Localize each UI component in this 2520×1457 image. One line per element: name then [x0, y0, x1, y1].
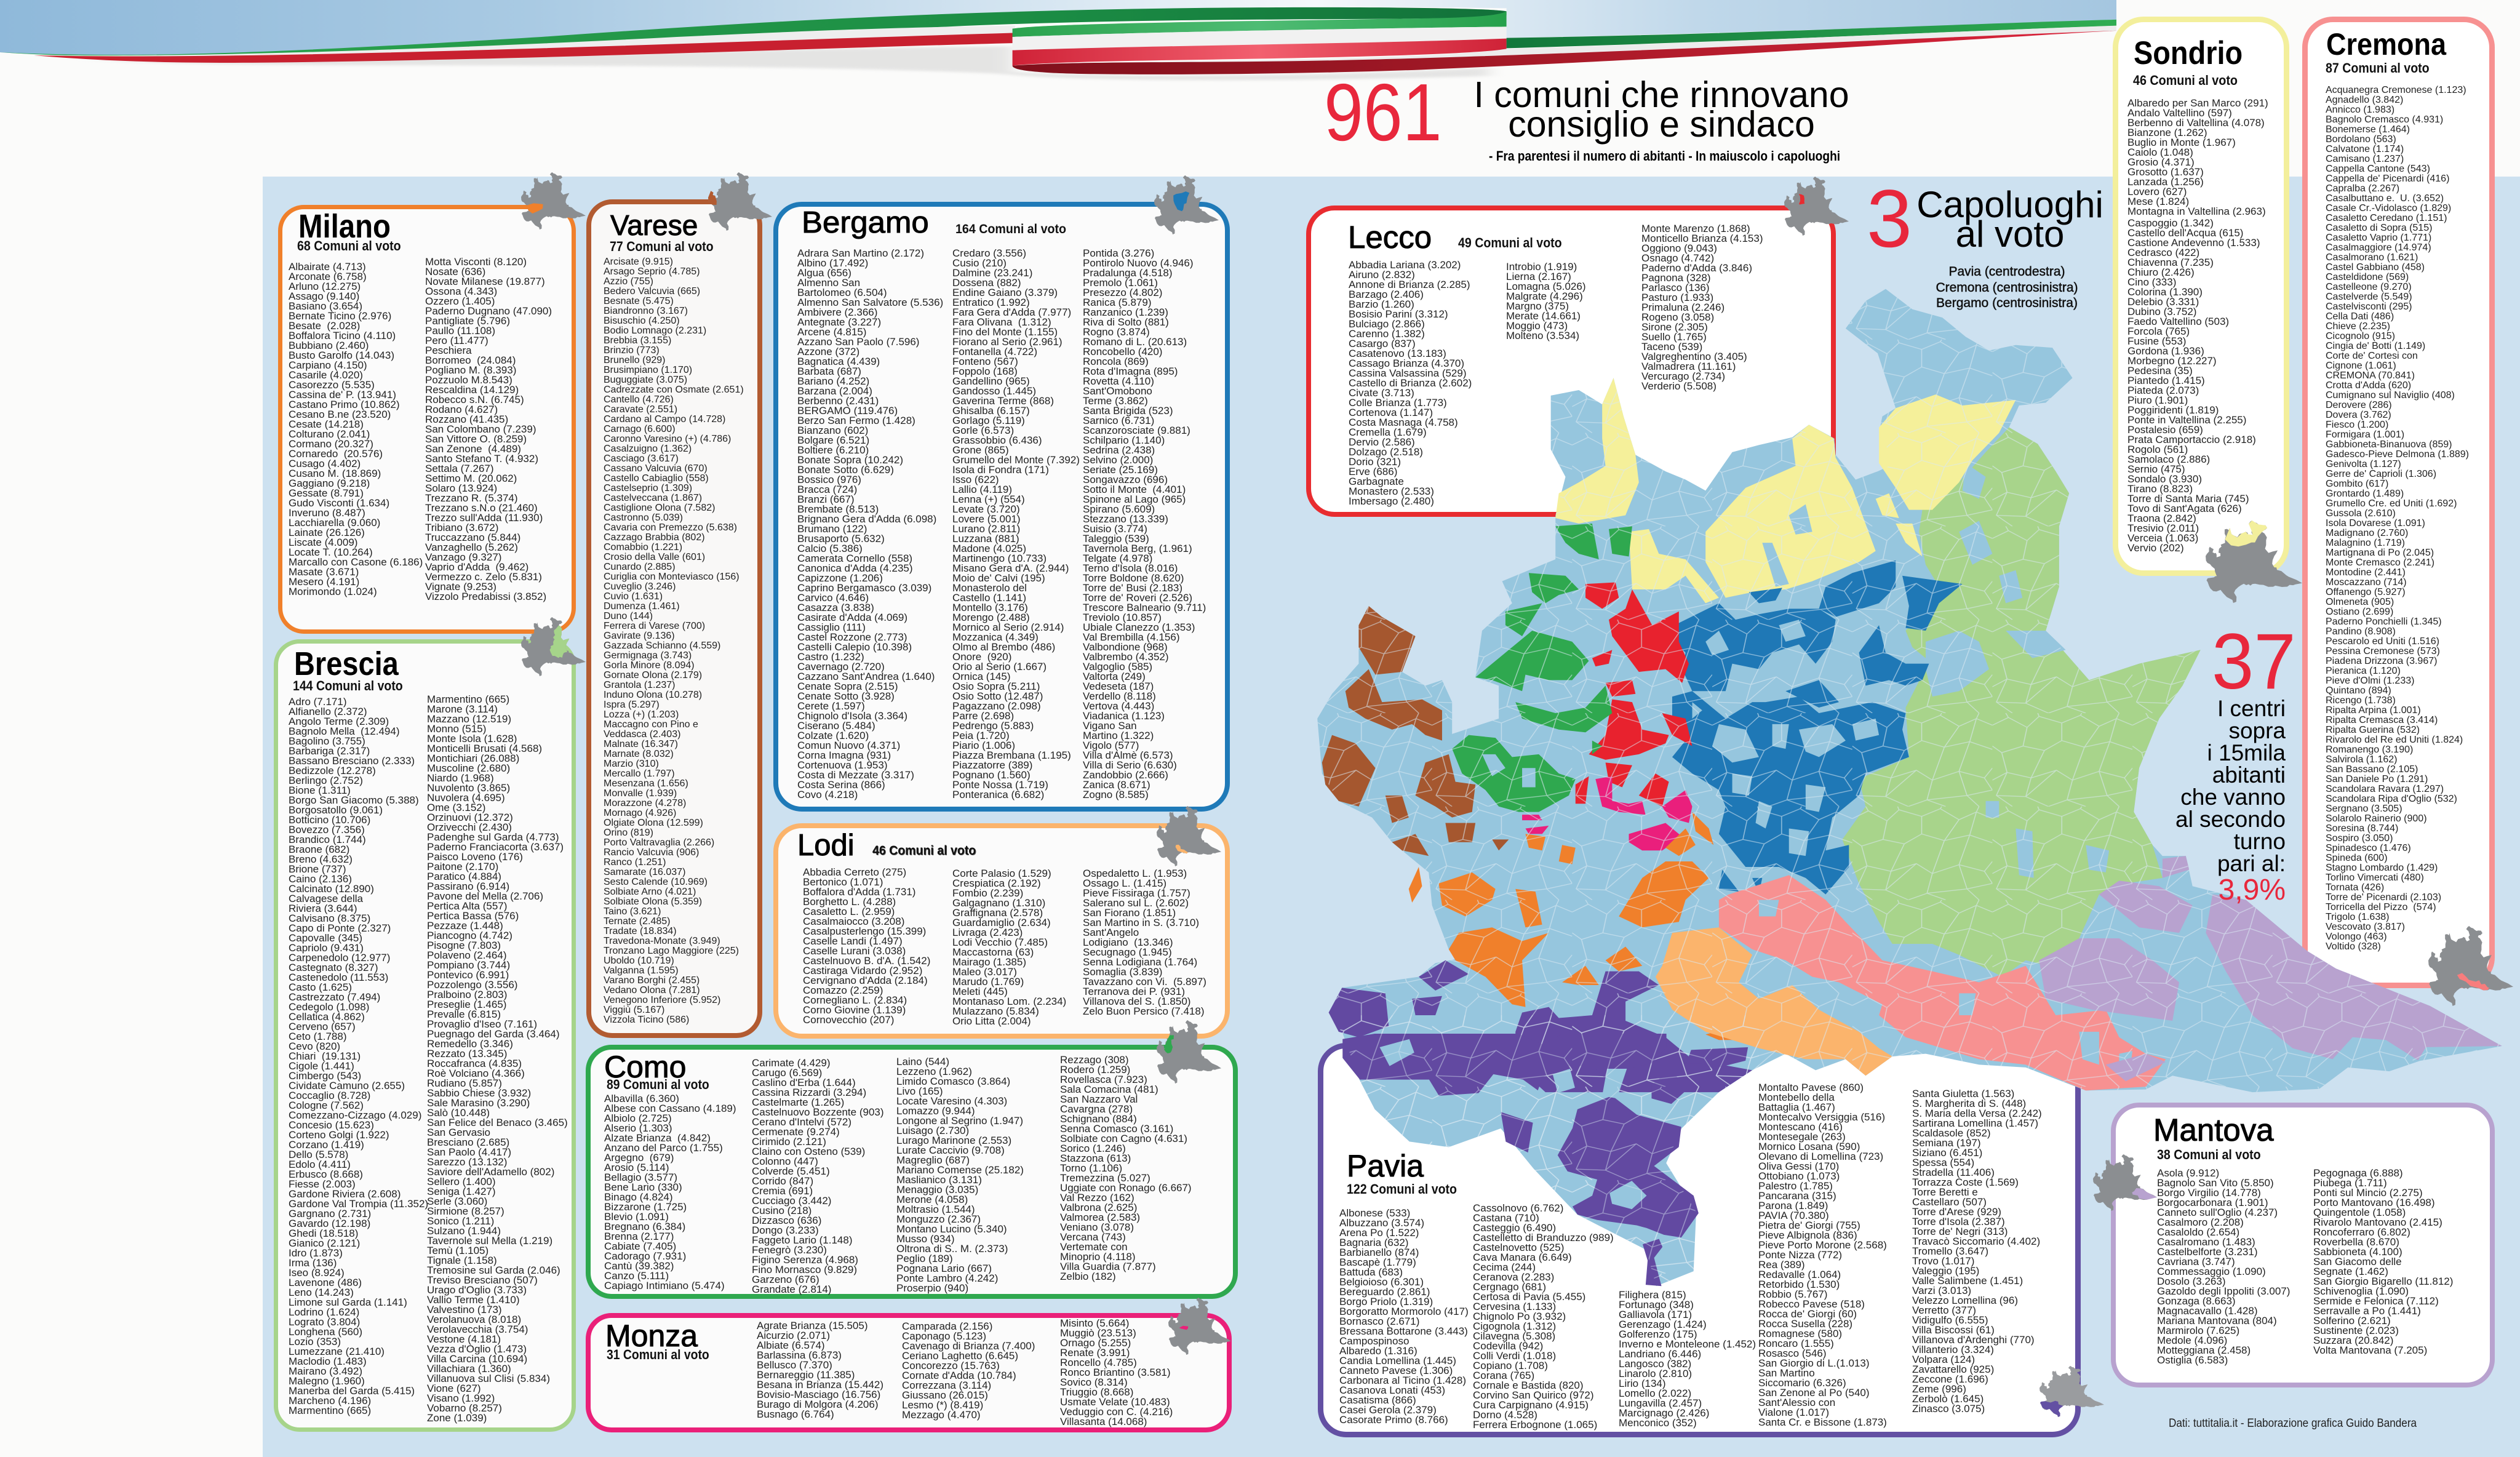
mini map: Mantova: [2093, 1154, 2157, 1211]
Pavia list column 5: Santa Giuletta (1.563) S. Margherita di S. (448) S. Maria della Versa (2.242) Sartirana Lomellina (1.457) Scaldasole (852) Semiana (197) Siziano (6.451) Spessa (554) Stradella (11.406) Torrazza Coste (1.569) Torre Beretti e Castellaro (507) Torre d'Arese (929) Torre d'Isola (2.387) Torre de' Negri (313) Travacò Siccomario (4.402) Tromello (3.647) Trovo (1.017) Valeggio (195) Valle Salimbene (1.451) Varzi (3.013) Velezzo Lomellina (96) Verretto (377) Vidigulfo (6.555) Villa Biscossi (61) Villanova d'Ardenghi (770) Villanterio (3.324) Volpara (124) Zavattarello (925) Zeccone (1.696) Zeme (996) Zerbolò (1.645) Zinasco (3.075): [1912, 1088, 2042, 1415]
Lodi title: Lodi: [797, 829, 855, 862]
number 3: 3: [1867, 174, 1912, 265]
Bergamo list column 3: Pontida (3.276) Pontirolo Nuovo (4.946) Pradalunga (4.518) Premolo (1.061) Presezzo (4.802) Ranica (5.879) Ranzanico (1.239) Riva di Solto (881) Rogno (3.874) Romano di L. (20.613) Roncobello (420) Roncola (869) Rota d'Imagna (895) Rovetta (4.110) Sant'Omobono Terme (3.862) Santa Brigida (523) Sarnico (6.731) Scanzorosciate (9.881) Schilpario (1.140) Sedrina (2.438) Selvino (2.000) Seriate (25.169) Songavazzo (696) Sotto il Monte (4.401) Spinone al Lago (965) Spirano (5.609) Stezzano (13.339) Suisio (3.774) Taleggio (539) Tavernola Berg, (1.961) Telgate (4.978) Terno d'Isola (8.016) Torre Boldone (8.620) Torre de' Busi (2.183) Torre de' Roveri (2.526) Trescore Balneario (9.711) Treviolo (10.857) Ubiale Clanezzo (1.353) Val Brembilla (4.156) Valbondione (968) Valbrembo (4.352) Valgoglio (585) Valtorta (249) Vedeseta (187) Verdello (8.118) Vertova (4.443) Viadanica (1.123) Vigano San Martino (1.322) Vigolo (577) Villa d'Almè (6.573) Villa di Serio (6.630) Zandobbio (2.666) Zanica (8.671) Zogno (8.585): [1083, 247, 1206, 800]
callout text: I centri sopra i 15mila abitanti che vanno al secondo turno pari al:: [2175, 696, 2286, 876]
Milano list column 2: Motta Visconti (8.120) Nosate (636) Novate Milanese (19.877) Ossona (4.343) Ozzero (1.405) Paderno Dugnano (47.090) Pantigliate (5.796) Paullo (11.108) Pero (11.477) Peschiera Borromeo (24.084) Pogliano M. (8.393) Pozzuolo M.8.543) Rescaldina (14.129) Robecco s.N. (6.745) Rodano (4.627) Rozzano (41.435) San Colombano (7.239) San Vittore O. (8.259) San Zenone (4.489) Santo Stefano T. (4.932) Settala (7.267) Settimo M. (20.062) Solaro (13.924) Trezzano R. (5.374) Trezzano s.N.o (21.460) Trezzo sull'Adda (11.930) Tribiano (3.672) Truccazzano (5.844) Vanzaghello (5.262) Vanzago (9.327) Vaprio d'Adda (9.462) Vermezzo c. Zelo (5.831) Vignate (9.253) Vizzolo Predabissi (3.852): [425, 256, 552, 602]
Bergamo list column 2: Credaro (3.556) Cusio (210) Dalmine (23.241) Dossena (882) Endine Gaiano (3.379) Entratico (1.992) Fara Gera d'Adda (7.977) Fara Olivana (1.312) Fino del Monte (1.155) Fiorano al Serio (2.961) Fontanella (4.722) Fonteno (567) Foppolo (168) Gandellino (965) Gandosso (1.445) Gaverina Terme (868) Ghisalba (6.157) Gorlago (5.119) Gorle (6.573) Grassobbio (6.436) Grone (865) Grumello del Monte (7.392) Isola di Fondra (171) Isso (622) Lallio (4.119) Lenna (+) (554) Levate (3.720) Lovere (5.001) Lurano (2.811) Luzzana (881) Madone (4.025) Martinengo (10.733) Misano Gera d'A. (2.944) Moio de' Calvi (195) Monasterolo del Castello (1.141) Montello (3.176) Morengo (2.488) Mornico al Serio (2.914) Mozzanica (4.349) Olmo al Brembo (486) Onore (920) Orio al Serio (1.667) Ornica (145) Osio Sopra (5.211) Osio Sotto (12.487) Pagazzano (2.098) Parre (2.698) Pedrengo (5.883) Peia (1.720) Piario (1.006) Piazza Brembana (1.195) Piazzatorre (389) Pognano (1.560) Ponte Nossa (1.719) Ponteranica (6.682): [952, 247, 1080, 800]
province: Como: [1452, 524, 1632, 812]
blue background panel: [263, 177, 2520, 1457]
Como list column 4: Rezzago (308) Rodero (1.259) Rovellasca (7.923) Sala Comacina (481) San Nazzaro Val Cavargna (278) Schignano (884) Senna Comasco (3.161) Solbiate con Cagno (4.631) Sorico (1.246) Stazzona (613) Torno (1.106) Tremezzina (5.027) Uggiate con Ronago (6.667) Val Rezzo (162) Valbrona (2.625) Valmorea (2.583) Veniano (3.078) Vercana (743) Vertemate con Minoprio (4.118) Villa Guardia (7.877) Zelbio (182): [1060, 1054, 1192, 1282]
Monza list column 2: Camparada (2.156) Caponago (5.123) Cavenago di Brianza (7.400) Ceriano Laghetto (6.645) Concorezzo (15.763) Cornate d'Adda (10.784) Correzzana (3.114) Giussano (26.015) Lesmo (*) (8.419) Mezzago (4.470): [902, 1320, 1035, 1421]
Como count: 89 Comuni al voto: [607, 1077, 709, 1092]
panel text: Cremona: [2326, 27, 2469, 952]
Lodi list column 1: Abbadia Cerreto (275) Bertonico (1.071) Boffalora d'Adda (1.731) Borghetto L. (4.288) Casaletto L. (2.959) Casalmaiocco (3.208) Casalpusterlengo (15.399) Caselle Landi (1.497) Caselle Lurani (3.038) Castelnuovo B. d'A. (1.542) Castiraga Vidardo (2.952) Cervignano d'Adda (2.184) Comazzo (2.259) Cornegliano L. (2.834) Corno Giovine (1.139) Cornovecchio (207): [803, 866, 930, 1026]
panel: Milano: [278, 205, 576, 634]
Mantova title: Mantova: [2153, 1112, 2274, 1148]
tricolour ribbon banner: [0, 0, 2116, 81]
municipal borders: [1292, 279, 2513, 1295]
province: Monza: [1522, 776, 1693, 850]
mini map: Bergamo: [1154, 175, 1219, 234]
Lodi count: 46 Comuni al voto: [872, 844, 976, 858]
Milano title: Milano: [298, 208, 391, 245]
Pavia title: Pavia: [1347, 1149, 1424, 1183]
panel: Lodi: [773, 823, 1230, 1039]
Lecco list column 1: Abbadia Lariana (3.202) Airuno (2.832) Annone di Brianza (2.285) Barzago (2.406) Barzio (1.260) Bosisio Parini (3.312) Bulciago (2.866) Carenno (1.382) Casargo (837) Casatenovo (13.183) Cassago Brianza (4.370) Cassina Valsassina (529) Castello di Brianza (2.602) Civate (3.713) Colle Brianza (1.773) Cortenova (1.147) Costa Masnaga (4.758) Cremella (1.679) Dervio (2.586) Dolzago (2.518) Dorio (321) Erve (686) Garbagnate Monastero (2.533) Imbersago (2.480): [1349, 259, 1472, 507]
Lecco list column 3: Monte Marenzo (1.868) Monticello Brianza (4.153) Oggiono (9.043) Osnago (4.742) Paderno d'Adda (3.846) Pagnona (328) Parlasco (136) Pasturo (1.933) Primaluna (2.246) Rogeno (3.058) Sirone (2.305) Suello (1.765) Taceno (539) Valgreghentino (3.405) Valmadrera (11.161) Vercurago (2.734) Verderio (5.508): [1641, 223, 1763, 392]
map: Lombardy municipalities voting by province: [1317, 289, 2502, 1286]
Brescia title: Brescia: [294, 645, 399, 682]
panel text: Mantova: [2153, 1112, 2453, 1366]
province: Lecco: [1576, 582, 1693, 807]
Pavia list column 3: Filighera (815) Fortunago (348) Galliavola (171) Gerenzago (1.424) Golferenzo (175) Inverno e Monteleone (1.452) Landriano (6.446) Langosco (382) Linarolo (2.810) Lirio (134) Lomello (2.022) Lungavilla (2.457) Marcignago (2.426) Menconico (352): [1619, 1289, 1756, 1429]
province: Lodi: [1656, 927, 1892, 1076]
mini map: Brescia: [521, 617, 586, 676]
mini map: Lecco: [1784, 177, 1849, 236]
panel: Varese: [586, 199, 762, 1038]
Sondrio list part 1: Albaredo per San Marco (291) Andalo Valtellino (597) Berbenno di Valtellina (4.078) Bianzone (1.262) Buglio in Monte (1.967) Caiolo (1.048) Grosio (4.371) Grosotto (1.637) Lanzada (1.256) Lovero (627) Mese (1.824) Montagna in Valtellina (2.963): [2127, 97, 2268, 217]
panel frame: Mantova: [2111, 1103, 2495, 1387]
Lecco title: Lecco: [1348, 220, 1432, 255]
mini map: Como: [1157, 1020, 1221, 1084]
panel frame: Cremona: [2302, 17, 2495, 988]
heading: number of comuni: 961: [1324, 67, 1442, 158]
mini map: Monza: [1168, 1298, 1231, 1355]
Mantova list column 1: Asola (9.912) Bagnolo San Vito (5.850) Borgo Virgilio (14.778) Borgocarbonara (1.901) Canneto sull'Oglio (4.237) Casalmoro (2.208) Casaloldo (2.654) Casalromano (1.483) Castelbelforte (3.231) Cavriana (3.747) Commessaggio (1.090) Dosolo (3.263) Gazoldo degli Ippoliti (3.007) Gonzaga (8.663) Magnacavallo (1.428) Mariana Mantovana (804) Marmirolo (7.625) Medole (4.096) Motteggiana (2.458) Ostiglia (6.583): [2157, 1167, 2290, 1366]
Bergamo title: Bergamo: [802, 206, 929, 239]
province: Mantova: [2039, 856, 2502, 1081]
Varese title: Varese: [610, 209, 698, 241]
province: Cremona: [1719, 875, 2166, 1090]
province: Pavia south: [1342, 1034, 1748, 1286]
callout: 3 capoluoghi: [1867, 174, 2103, 310]
Sondrio count: 46 Comuni al voto: [2133, 73, 2238, 88]
Mantova list column 2: Pegognaga (6.888) Piubega (1.711) Ponti sul Mincio (2.275) Porto Mantovano (16.498) Quingentole (1.058) Rivarolo Mantovano (2.415) Roncoferraro (6.802) Roverbella (8.670) Sabbioneta (4.100) San Giacomo delle Segnate (1.462) San Giorgio Bigarello (11.812) Schivenoglia (1.090) Sermide e Felonica (7.112) Serravalle a Po (1.441) Solferino (2.621) Sustinente (2.023) Suzzara (20.842) Volta Mantovana (7.205): [2313, 1167, 2453, 1356]
Mantova count: 38 Comuni al voto: [2157, 1147, 2261, 1162]
mini map: Pavia: [2040, 1366, 2104, 1417]
capoluoghi heading: Capoluoghi al voto: [1916, 184, 2103, 255]
Monza list column 3: Misinto (5.664) Muggiò (23.513) Ornago (5.255) Renate (3.991) Roncello (4.785) Ronco Briantino (3.581) Sovico (8.314) Triuggio (8.668) Usmate Velate (10.483) Veduggio con C. (4.216) Villasanta (14.068): [1060, 1317, 1173, 1427]
Brescia count: 144 Comuni al voto: [293, 678, 403, 693]
Lecco list column 2: Introbio (1.919) Lierna (2.167) Lomagna (5.026) Malgrate (4.296) Margno (375) Merate (14.661) Moggio (473) Molteno (3.534): [1506, 261, 1585, 341]
Cremona list: Acquanegra Cremonese (1.123) Agnadello (3.842) Annicco (1.983) Bagnolo Cremasco (4.931) Bonemerse (1.464) Bordolano (563) Calvatone (1.174) Camisano (1.237) Cappella Cantone (543) Cappella de' Picenardi (416) Capralba (2.267) Casalbuttano e. U. (3.652) Casale Cr.-Vidolasco (1.829) Casaletto Ceredano (1.151) Casaletto di Sopra (515) Casaletto Vaprio (1.771) Casalmaggiore (14.974) Casalmorano (1.621) Castel Gabbiano (458) Casteldidone (569) Castelleone (9.270) Castelverde (5.549) Castelvisconti (295) Cella Dati (486) Chieve (2.235) Cicognolo (915) Cingia de' Botti (1.149) Corte de' Cortesi con Cignone (1.061) CREMONA (70.841) Crotta d'Adda (620) Cumignano sul Naviglio (408) Derovere (286) Dovera (3.762) Fiesco (1.200) Formigara (1.001) Gabbioneta-Binanuova (859) Gadesco-Pieve Delmona (1.889) Genivolta (1.127) Gerre de' Caprioli (1.306) Gombito (617) Grontardo (1.489) Grumello Cre. ed Uniti (1.692) Gussola (2.610) Isola Dovarese (1.091) Madignano (2.760) Malagnino (1.719) Martignana di Po (2.045) Monte Cremasco (2.241) Montodine (2.441) Moscazzano (714) Offanengo (5.927) Olmeneta (905) Ostiano (2.699) Paderno Ponchielli (1.345) Pandino (8.908) Pescarolo ed Uniti (1.516) Pessina Cremonese (573) Piadena Drizzona (3.967) Pieranica (1.120) Pieve d'Olmi (1.233) Quintano (894) Ricengo (1.738) Ripalta Arpina (1.001) Ripalta Cremasca (3.414) Ripalta Guerina (532) Rivarolo del Re ed Uniti (1.824) Romanengo (3.190) Salvirola (1.162) San Bassano (2.105) San Daniele Po (1.291) Scandolara Ravara (1.297) Scandolara Ripa d'Oglio (532) Sergnano (3.505) Solarolo Rainerio (900) Soresina (8.744) Sospiro (3.050) Spinadesco (1.476) Spineda (600) Stagno Lombardo (1.429) Torlino Vimercati (480) Tornata (426) Torre de' Picenardi (2.103) Torricella del Pizzo (574) Trigolo (1.638) Vescovato (3.817) Volongo (463) Voltido (328): [2326, 85, 2469, 952]
panel frame: Pavia: [1318, 1043, 2081, 1437]
capoluoghi list: Pavia (centrodestra) Cremona (centrosinistra) Bergamo (centrosinistra): [1936, 265, 2078, 310]
panel: Bergamo: [773, 202, 1230, 812]
mini map: Milano: [521, 172, 586, 230]
Pavia list column 2: Cassolnovo (6.762) Castana (710) Casteggio (6.490) Castelletto di Branduzzo (989) Castelnovetto (525) Cava Manara (6.649) Cecima (244) Ceranova (2.283) Cergnago (681) Certosa di Pavia (5.455) Cervesina (1.133) Chignolo Po (3.932) Cigognola (1.312) Cilavegna (5.308) Codevilla (942) Colli Verdi (1.018) Copiano (1.708) Corana (765) Cornale e Bastida (820) Corvino San Quirico (972) Cura Carpignano (4.915) Dorno (4.528) Ferrera Erbognone (1.065): [1473, 1202, 1614, 1431]
panel text: Pavia: [1339, 1082, 2042, 1431]
Pavia list column 4: Montalto Pavese (860) Montebello della Battaglia (1.467) Montecalvo Versiggia (516) Montescano (416) Montesegale (263) Mornico Losana (590) Olevano di Lomellina (723) Oliva Gessi (170) Ottobiano (1.073) Palestro (1.785) Pancarana (315) Parona (1.849) PAVIA (70.380) Pietra de' Giorgi (755) Pieve Albignola (836) Pieve Porto Morone (2.568) Ponte Nizza (772) Rea (389) Redavalle (1.064) Retorbido (1.530) Robbio (5.767) Robecco Pavese (518) Rocca de' Giorgi (60) Rocca Susella (228) Romagnese (580) Roncaro (1.555) Rosasco (546) San Giorgio di L.(1.013) San Martino Siccomario (6.326) San Zenone al Po (540) Sant'Alessio con Vialone (1.017) Santa Cr. e Bissone (1.873): [1758, 1082, 1887, 1428]
Bergamo list column 1: Adrara San Martino (2.172) Albino (17.492) Algua (656) Almenno San Bartolomeo (6.504) Almenno San Salvatore (5.536) Ambivere (2.366) Antegnate (3.227) Arcene (4.815) Azzano San Paolo (7.596) Azzone (372) Bagnatica (4.439) Barbata (687) Bariano (4.252) Barzana (2.004) Berbenno (2.431) BERGAMO (119.476) Berzo San Fermo (1.428) Bianzano (602) Bolgare (6.521) Boltiere (6.210) Bonate Sopra (10.242) Bonate Sotto (6.629) Bossico (976) Bracca (724) Branzi (667) Brembate (8.513) Brignano Gera d'Adda (6.098) Brumano (122) Brusaporto (5.632) Calcio (5.386) Camerata Cornello (558) Canonica d'Adda (4.235) Capizzone (1.206) Caprino Bergamasco (3.039) Carvico (4.646) Casazza (3.838) Casirate d'Adda (4.069) Cassiglio (111) Castel Rozzone (2.773) Castelli Calepio (10.398) Castro (1.232) Cavernago (2.720) Cazzano Sant'Andrea (1.640) Cenate Sopra (2.515) Cenate Sotto (3.928) Cerete (1.597) Chignolo d'Isola (3.364) Ciserano (5.484) Colzate (1.620) Comun Nuovo (4.371) Corna Imagna (931) Cortenuova (1.953) Costa di Mezzate (3.317) Costa Serina (866) Covo (4.218): [797, 247, 943, 800]
Lecco count: 49 Comuni al voto: [1458, 235, 1562, 250]
base: municipalities not voting: [1317, 289, 2502, 1286]
panel: Como: [586, 1045, 1238, 1299]
percentage: 3,9%: [2219, 874, 2286, 906]
Varese list: Arcisate (9.915) Arsago Seprio (4.785) Azzio (755) Bedero Valcuvia (665) Besnate (5.475) Biandronno (3.167) Bisuschio (4.250) Bodio Lomnago (2.231) Brebbia (3.155) Brinzio (773) Brunello (929) Brusimpiano (1.170) Buguggiate (3.075) Cadrezzate con Osmate (2.651) Cantello (4.726) Caravate (2.551) Cardano al Campo (14.728) Carnago (6.600) Caronno Varesino (+) (4.786) Casalzuigno (1.362) Casciago (3.617) Cassano Valcuvia (670) Castello Cabiaglio (558) Castelseprio (1.309) Castelveccana (1.867) Castiglione Olona (7.582) Castronno (5.039) Cavaria con Premezzo (5.638) Cazzago Brabbia (802) Comabbio (1.221) Crosio della Valle (601) Cunardo (2.885) Curiglia con Monteviasco (156) Cuveglio (3.246) Cuvio (1.631) Dumenza (1.461) Duno (144) Ferrera di Varese (700) Gavirate (9.136) Gazzada Schianno (4.559) Germignaga (3.743) Gorla Minore (8.094) Gornate Olona (2.179) Grantola (1.237) Induno Olona (10.278) Ispra (5.297) Lozza (+) (1.203) Maccagno con Pino e Veddasca (2.403) Malnate (16.347) Marnate (8.032) Marzio (310) Mercallo (1.797) Mesenzana (1.656) Monvalle (1.939) Morazzone (4.278) Mornago (4.926) Olgiate Olona (12.599) Orino (819) Porto Valtravaglia (2.266) Rancio Valcuvia (906) Ranco (1.251) Samarate (16.037) Sesto Calende (10.969) Solbiate Arno (4.021) Solbiate Olona (5.359) Taino (3.621) Ternate (2.485) Tradate (18.834) Travedona-Monate (3.949) Tronzano Lago Maggiore (225) Uboldo (10.719) Valganna (1.595) Varano Borghi (2.455) Vedano Olona (7.281) Venegono Inferiore (5.952) Viggiù (5.167) Vizzola Ticino (586): [604, 257, 744, 1025]
panel: Monza: [586, 1313, 1232, 1432]
Monza list column 1: Agrate Brianza (15.505) Aicurzio (2.071) Albiate (6.574) Barlassina (6.873) Bellusco (7.370) Bernareggio (11.385) Besana in Brianza (15.442) Bovisio-Masciago (16.756) Burago di Molgora (4.206) Busnago (6.764): [757, 1320, 883, 1420]
Lodi list column 2: Corte Palasio (1.529) Crespiatica (2.192) Fombio (2.239) Galgagnano (1.310) Graffignana (2.578) Guardamiglio (2.634) Livraga (2.423) Lodi Vecchio (7.485) Maccastorna (63) Mairago (1.385) Maleo (3.017) Marudo (1.769) Meleti (445) Montanaso Lom. (2.234) Mulazzano (5.834) Orio Litta (2.004): [952, 868, 1066, 1027]
Varese count: 77 Comuni al voto: [610, 239, 714, 254]
province: Pavia north: [1329, 960, 1752, 1092]
Pavia count: 122 Comuni al voto: [1347, 1181, 1457, 1197]
Brescia list column 1: Adro (7.171) Alfianello (2.372) Angolo Terme (2.309) Bagnolo Mella (12.494) Bagolino (3.755) Barbariga (2.317) Bassano Bresciano (2.333) Bedizzole (12.278) Berlingo (2.752) Bione (1.311) Borgo San Giacomo (5.388) Borgosatollo (9.061) Botticino (10.706) Bovezzo (7.356) Brandico (1.744) Braone (682) Breno (4.632) Brione (737) Caino (2.136) Calcinato (12.890) Calvagese della Riviera (3.644) Calvisano (8.375) Capo di Ponte (2.327) Capovalle (345) Capriolo (9.431) Carpenedolo (12.977) Castegnato (8.327) Castenedolo (11.553) Casto (1.625) Castrezzato (7.494) Cedegolo (1.098) Cellatica (4.862) Cerveno (657) Ceto (1.788) Cevo (820) Chiari (19.131) Cigole (1.441) Cimbergo (543) Cividate Camuno (2.655) Coccaglio (8.728) Cologne (7.562) Comezzano-Cizzago (4.029) Concesio (15.623) Corteno Golgi (1.922) Corzano (1.419) Dello (5.578) Edolo (4.411) Erbusco (8.668) Fiesse (2.003) Gardone Riviera (2.608) Gardone Val Trompia (11.352) Gargnano (2.731) Gavardo (12.198) Ghedi (18.518) Gianico (2.121) Idro (1.873) Irma (136) Iseo (8.924) Lavenone (486) Leno (14.243) Limone sul Garda (1.141) Lodrino (1.624) Lograto (3.804) Longhena (560) Lozio (353) Lumezzane (21.410) Maclodio (1.483) Mairano (3.492) Malegno (1.960) Manerba del Garda (5.415) Marcheno (4.196) Marmentino (665): [289, 696, 428, 1416]
Sondrio title: Sondrio: [2134, 35, 2243, 71]
Monza title: Monza: [605, 1319, 698, 1353]
province: Milano: [1409, 812, 1739, 1040]
Cremona title: Cremona: [2326, 27, 2446, 62]
panel text: Lecco: [1348, 220, 1763, 507]
Lodi list column 3: Ospedaletto L. (1.953) Ossago L. (1.415) Pieve Fissiraga (1.757) Salerano sul L. (2.602) San Fiorano (1.851) San Martino in S. (3.710) Sant'Angelo Lodigiano (13.346) Secugnago (1.945) Senna Lodigiana (1.764) Somaglia (3.839) Tavazzano con Vi. (5.897) Terranova dei P. (931) Villanova del S. (1.850) Zelo Buon Persico (7.418): [1083, 868, 1206, 1017]
panel: Sondrio: [2113, 17, 2289, 576]
mini map: Lodi: [1157, 806, 1221, 866]
Bergamo count: 164 Comuni al voto: [955, 222, 1066, 236]
Milano list column 1: Albairate (4.713) Arconate (6.758) Arluno (12.275) Assago (9.140) Basiano (3.654) Bernate Ticino (2.976) Besate (2.028) Boffalora Ticino (4.110) Bubbiano (2.460) Busto Garolfo (14.043) Carpiano (4.150) Casarile (4.020) Casorezzo (5.535) Cassina de' P. (13.941) Castano Primo (10.862) Cesano B.ne (23.520) Cesate (14.218) Colturano (2.041) Cormano (20.327) Cornaredo (20.576) Cusago (4.402) Cusano M. (18.869) Gaggiano (9.218) Gessate (8.791) Gudo Visconti (1.634) Inveruno (8.487) Lacchiarella (9.060) Lainate (26.126) Liscate (4.009) Locate T. (10.264) Marcallo con Casone (6.186) Masate (3.671) Mesero (4.191) Morimondo (1.024): [289, 261, 423, 597]
province: Varese: [1322, 606, 1509, 856]
Pavia list column 1: Albonese (533) Albuzzano (3.574) Arena Po (1.522) Bagnaria (632) Barbianello (874) Bascapè (1.779) Battuda (683) Belgioioso (6.301) Bereguardo (2.861) Borgo Priolo (1.319) Borgoratto Mormorolo (417) Bornasco (2.671) Bressana Bottarone (3.443) Campospinoso Albaredo (1.316) Candia Lomellina (1.445) Canneto Pavese (1.306) Carbonara al Ticino (1.428) Casanova Lonati (453) Casatisma (866) Casei Gerola (2.379) Casorate Primo (8.766): [1339, 1207, 1469, 1426]
mini map: Sondrio: [2206, 521, 2302, 603]
Como list column 1: Albavilla (6.360) Albese con Cassano (4.189) Albiolo (2.725) Alserio (1.303) Alzate Brianza (4.842) Anzano del Parco (1.755) Argegno (679) Arosio (5.114) Bellagio (3.577) Bene Lario (330) Binago (4.824) Bizzarone (1.725) Blevio (1.091) Bregnano (6.384) Brenna (2.177) Cabiate (7.405) Cadorago (7.931) Cantù (39.382) Canzo (5.111) Capiago Intimiano (5.474): [604, 1093, 736, 1291]
Sondrio list part 2: Caspoggio (1.342) Castello dell'Acqua (615) Castione Andevenno (1.533) Cedrasco (422) Chiavenna (7.235) Chiuro (2.426) Cino (333) Colorina (1.390) Delebio (3.331) Dubino (3.752) Faedo Valtellino (503) Forcola (765) Fusine (553) Gordona (1.936) Morbegno (12.227) Pedesina (35) Piantedo (1.415) Piateda (2.073) Piuro (1.901) Poggiridenti (1.819) Ponte in Valtellina (2.255) Postalesio (659) Prata Camportaccio (2.918) Rogolo (561) Samolaco (2.886) Sernio (475) Sondalo (3.930) Tirano (8.823) Torre di Santa Maria (745) Tovo di Sant'Agata (626) Traona (2.842) Tresivio (2.011) Verceia (1.063) Vervio (202): [2127, 217, 2260, 554]
callout: 37 centri: [2175, 618, 2296, 906]
Como list column 2: Carimate (4.429) Carugo (6.569) Caslino d'Erba (1.644) Cassina Rizzardi (3.294) Castelmarte (1.265) Castelnuovo Bozzente (903) Cerano d'Intelvi (572) Cermenate (9.274) Cirimido (2.121) Claino con Osteno (539) Colonno (447) Colverde (5.451) Corrido (847) Cremia (691) Cucciago (3.442) Cusino (218) Dizzasco (636) Dongo (3.233) Faggeto Lario (1.148) Fenegrò (3.230) Figino Serenza (4.968) Fino Mornasco (9.829) Garzeno (676) Grandate (2.814): [752, 1057, 884, 1295]
heading: main title: I comuni che rinnovano consiglio e sindaco: [1473, 74, 1849, 145]
number 37: 37: [2212, 618, 2296, 706]
mini map: Varese: [708, 172, 772, 231]
province: Bergamo: [1669, 561, 1963, 895]
mini map: Cremona: [2428, 926, 2513, 1006]
Brescia list column 2: Marmentino (665) Marone (3.114) Mazzano (12.519) Monno (515) Monte Isola (1.628) Monticelli Brusati (4.568) Montichiari (26.088) Muscoline (2.680) Niardo (1.968) Nuvolento (3.865) Nuvolera (4.695) Ome (3.152) Orzinuovi (12.372) Orzivecchi (2.430) Padenghe sul Garda (4.773) Paderno Franciacorta (3.637) Paisco Loveno (176) Paitone (2.170) Paratico (4.884) Passirano (6.914) Pavone del Mella (2.706) Pertica Alta (557) Pertica Bassa (576) Pezzaze (1.448) Piancogno (4.742) Pisogne (7.803) Polaveno (2.464) Pompiano (3.744) Pontevico (6.991) Pozzolengo (3.556) Pralboino (2.803) Preseglie (1.465) Prevalle (6.815) Provaglio d'Iseo (7.161) Puegnago del Garda (3.464) Remedello (3.346) Rezzato (13.345) Roccafranca (4.835) Roè Volciano (4.366) Rudiano (5.857) Sabbio Chiese (3.932) Sale Marasino (3.290) Salò (10.448) San Felice del Benaco (3.465) San Gervasio Bresciano (2.685) San Paolo (4.417) Sarezzo (13.132) Saviore dell'Adamello (802) Sellero (1.400) Seniga (1.427) Serle (3.060) Sirmione (8.257) Sonico (1.211) Sulzano (1.944) Tavernole sul Mella (1.219) Temù (1.105) Tignale (1.158) Tremosine sul Garda (2.046) Treviso Bresciano (507) Urago d'Oglio (3.733) Vallio Terme (1.410) Valvestino (173) Verolanuova (8.018) Verolavecchia (3.754) Vestone (4.181) Vezza d'Oglio (1.473) Villa Carcina (10.694) Villachiara (1.360) Villanuova sul Clisi (5.834) Vione (627) Visano (1.992) Vobarno (8.257) Zone (1.039): [427, 693, 568, 1424]
heading: subtitle note: - Fra parentesi il numero di abitanti - In maiuscolo i capoluoghi: [1489, 148, 1840, 164]
panel: Brescia: [274, 639, 576, 1432]
Como list column 3: Laino (544) Lezzeno (1.962) Limido Comasco (3.864) Livo (165) Locate Varesino (4.303) Lomazzo (9.944) Longone al Segrino (1.947) Luisago (2.730) Lurago Marinone (2.553) Lurate Caccivio (9.708) Magreglio (687) Mariano Comense (25.182) Maslianico (3.131) Menaggio (3.035) Merone (4.058) Moltrasio (1.544) Monguzzo (2.367) Montano Lucino (5.340) Musso (934) Oltrona di S.. M. (2.373) Peglio (189) Pognana Lario (667) Ponte Lambro (4.242) Proserpio (940): [896, 1056, 1024, 1294]
province: Brescia: [1842, 428, 2201, 977]
Como title: Como: [604, 1050, 686, 1084]
province: Sondrio: [1555, 378, 2016, 603]
Monza count: 31 Comuni al voto: [607, 1347, 709, 1362]
Milano count: 68 Comuni al voto: [297, 238, 401, 253]
Cremona count: 87 Comuni al voto: [2326, 60, 2430, 76]
credit line: Dati: tuttitalia.it - Elaborazione grafica Guido Bandera: [2169, 1417, 2417, 1430]
panel frame: Lecco: [1306, 206, 1836, 517]
